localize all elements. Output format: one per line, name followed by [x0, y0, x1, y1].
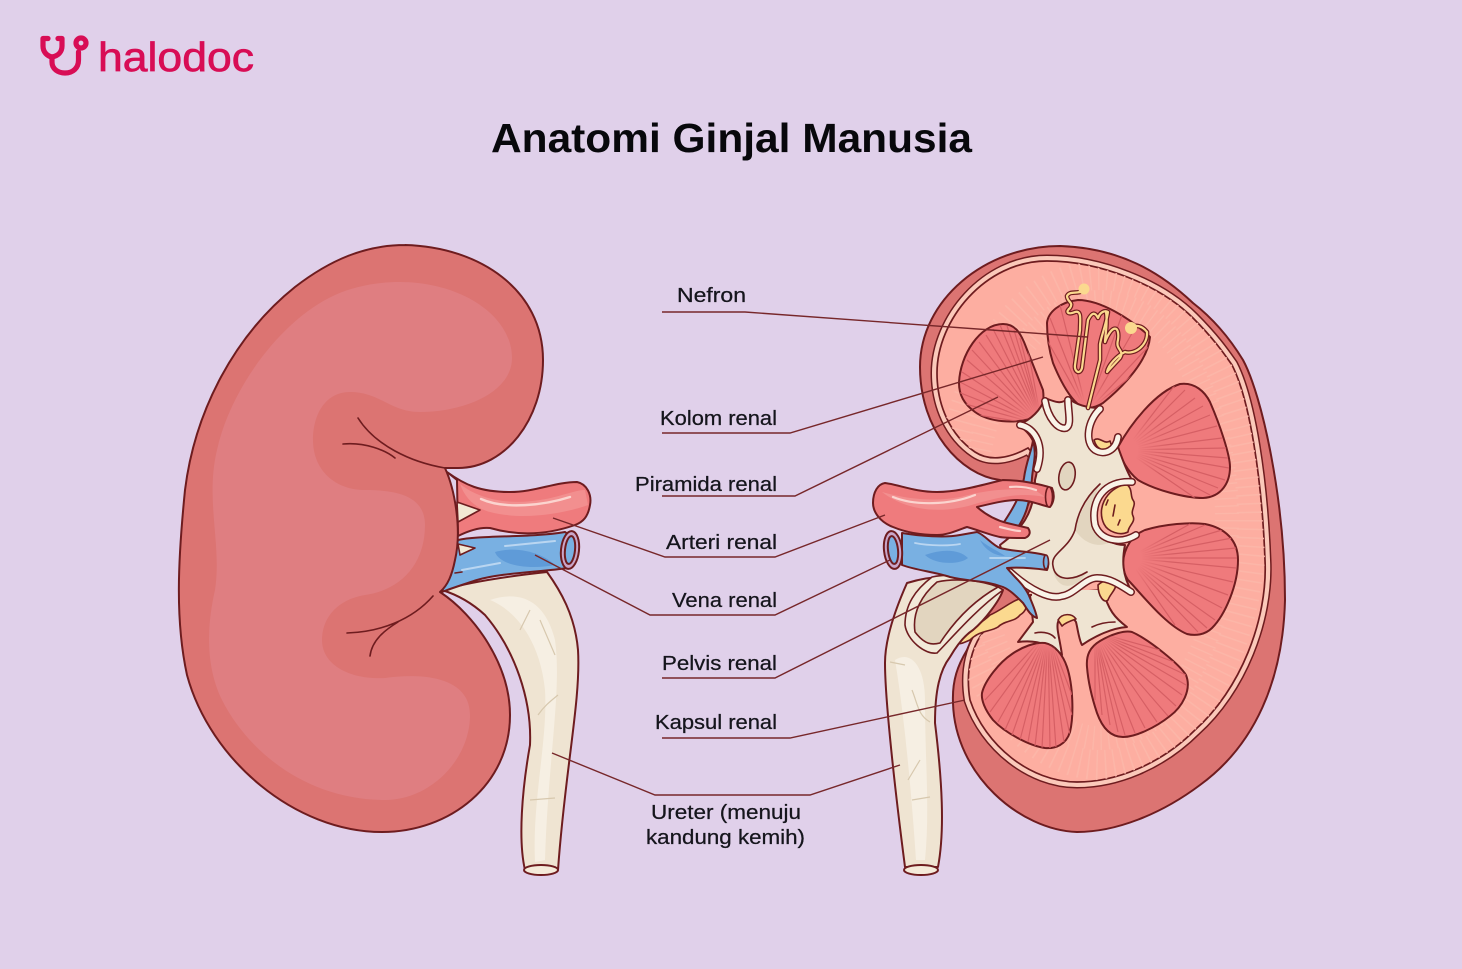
renal pelvis and calyces [957, 398, 1136, 644]
icon: stethoscope [43, 38, 86, 73]
pyramid: left top [958, 324, 1043, 425]
pyramid: right lower [1123, 523, 1238, 635]
yellow fat [957, 439, 1134, 644]
blue upper branch of renal vein [1000, 440, 1035, 535]
right kidney outer shell [920, 246, 1285, 832]
left kidney: exterior view [179, 245, 590, 875]
left renal artery [447, 472, 590, 536]
renal capsule ring [937, 261, 1265, 782]
label: Kolom renal: Kolom renal [660, 408, 777, 430]
leader lines [535, 312, 1087, 795]
pyramid: bottom right [1087, 631, 1188, 737]
pelvis shading [1053, 482, 1110, 586]
label: Arteri renal: Arteri renal [666, 532, 777, 554]
leader: Ureter [552, 753, 900, 795]
renal cortex [937, 261, 1265, 782]
cortex rays [948, 275, 1252, 765]
leader: Kapsul renal [662, 700, 965, 738]
left kidney highlight [209, 282, 512, 800]
label: Ureter line 2: kandung kemih) [646, 827, 805, 849]
leader: Nefron [662, 312, 1087, 337]
leader: Vena renal [535, 555, 890, 615]
pyramid: right upper [1118, 384, 1230, 498]
right renal vein [882, 530, 1048, 618]
logo wordmark: halodoc [98, 34, 254, 80]
vessel gaps [457, 502, 480, 555]
left kidney body [179, 245, 543, 832]
right renal artery [873, 480, 1054, 538]
left ureter [442, 572, 578, 875]
label: Ureter line 1: Ureter (menuju [651, 802, 801, 824]
lower calyx stems [1018, 590, 1127, 655]
label: Pelvis renal: Pelvis renal [662, 653, 777, 675]
pyramid: top with nefron [1047, 300, 1150, 412]
logo: halodoc [43, 34, 254, 80]
leader: Piramida renal [662, 397, 998, 496]
label: Kapsul renal: Kapsul renal [655, 712, 777, 734]
labels [635, 285, 805, 849]
label: Vena renal: Vena renal [672, 590, 777, 612]
leader: Kolom renal [662, 357, 1043, 433]
left kidney outline and creases [179, 245, 543, 832]
label: Nefron: Nefron [677, 285, 746, 307]
title: Anatomi Ginjal Manusia [491, 115, 973, 161]
label: Piramida renal: Piramida renal [635, 474, 777, 496]
lower calyx marks [1035, 622, 1115, 638]
calyx oval [1057, 461, 1077, 491]
left renal vein [442, 530, 581, 592]
white calyx cups [1010, 400, 1136, 597]
inner pelvis curve [1053, 484, 1100, 578]
leader: Pelvis renal [662, 540, 1050, 678]
nefron [1067, 284, 1147, 408]
right ureter and pelvis lobe [885, 575, 1003, 875]
leader: Arteri renal [553, 515, 885, 557]
pyramid: bottom left [982, 632, 1072, 748]
right kidney: cross section [873, 246, 1285, 875]
